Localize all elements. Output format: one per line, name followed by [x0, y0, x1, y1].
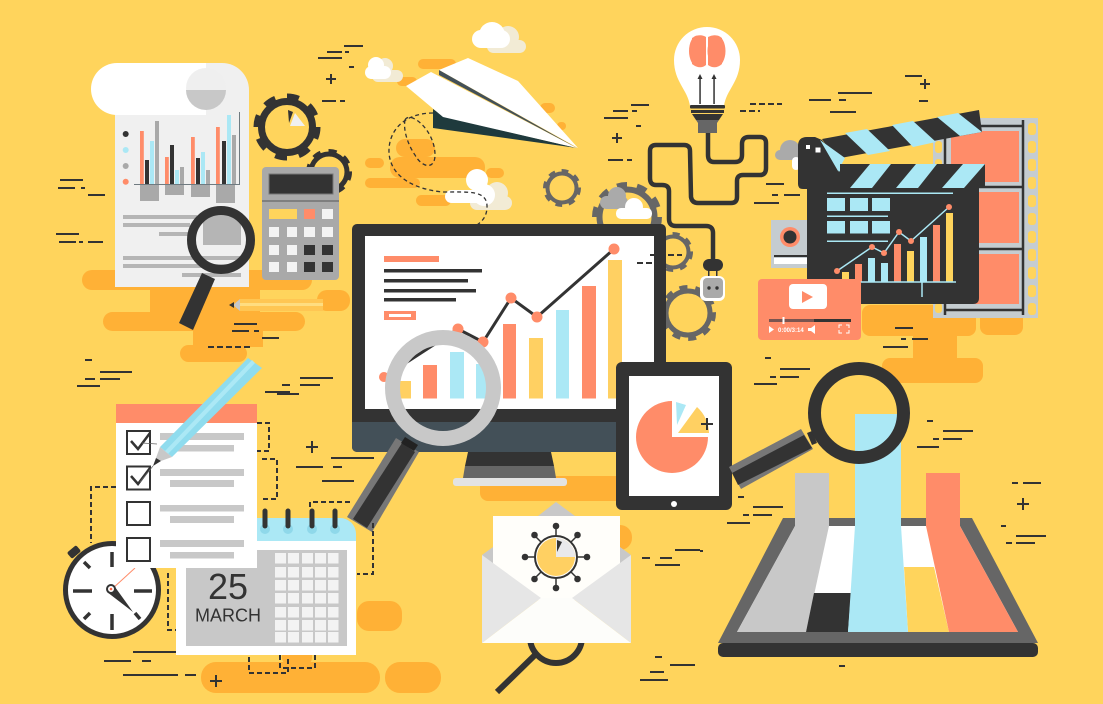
camera — [771, 220, 811, 268]
calendar date: 25 — [208, 566, 248, 607]
paper plane — [389, 58, 578, 237]
tablet — [616, 362, 732, 510]
lower gear — [662, 288, 714, 338]
monitor — [352, 224, 666, 486]
coral bar — [926, 473, 1018, 632]
gray bar — [737, 473, 829, 632]
small gear — [545, 171, 579, 205]
document text lines — [123, 215, 241, 277]
calendar month: MARCH — [195, 606, 261, 626]
document chart — [134, 112, 240, 203]
monitor stand — [453, 452, 567, 486]
side gear — [655, 234, 691, 270]
light bulb — [674, 27, 740, 133]
cloud: top left — [365, 57, 403, 82]
checkboxes — [127, 431, 150, 561]
film strip — [933, 118, 1038, 318]
screen bar chart — [397, 260, 622, 398]
grey gears around centre — [545, 171, 714, 338]
document with bar chart — [91, 63, 249, 287]
magnifier below envelope — [497, 611, 582, 692]
sparkle hinges — [806, 145, 820, 152]
brain — [689, 35, 726, 67]
document fold circle — [186, 68, 226, 110]
dash marks over monitor — [637, 255, 682, 263]
cloud: centre with trail — [445, 169, 512, 210]
clapperboard — [798, 110, 985, 304]
slate bar chart — [834, 204, 956, 297]
right magnifier — [729, 368, 904, 489]
pie chart — [636, 401, 713, 473]
plane flight trail — [389, 113, 487, 237]
plug and socket — [700, 259, 725, 301]
gear: dark large — [257, 97, 350, 192]
video player — [758, 279, 861, 340]
calendar rings — [260, 511, 340, 534]
pencil — [229, 299, 323, 311]
bulb arrows — [698, 74, 716, 104]
cable — [650, 133, 766, 260]
calendar grid — [275, 553, 338, 642]
tablet bar chart platform — [718, 414, 1038, 657]
blue pen — [140, 358, 262, 482]
large gear — [595, 185, 659, 249]
centre magnifier — [347, 338, 494, 532]
video player: 0:00/3:14 — [778, 328, 804, 334]
dashed connector lines — [91, 423, 373, 673]
slate lines and cells — [827, 192, 953, 242]
orange background blobs — [82, 59, 1023, 693]
envelope — [482, 502, 631, 643]
blue bar — [848, 414, 908, 632]
checklist — [116, 404, 257, 568]
black floor panel — [806, 593, 851, 632]
cloud behind clapperboard — [775, 140, 803, 170]
calendar — [176, 511, 356, 655]
checklist lines — [160, 433, 244, 558]
clapper arm — [822, 110, 982, 159]
clouds in gear — [600, 187, 652, 219]
legend dots — [123, 131, 129, 185]
screen line graph — [379, 244, 620, 382]
magnifier over document — [179, 210, 250, 330]
clock badge on letter — [522, 523, 590, 591]
stopwatch — [66, 544, 158, 636]
yellow floor panel — [904, 567, 949, 632]
screen text — [384, 256, 482, 320]
cloud: top centre — [472, 22, 526, 53]
calculator — [262, 167, 339, 280]
